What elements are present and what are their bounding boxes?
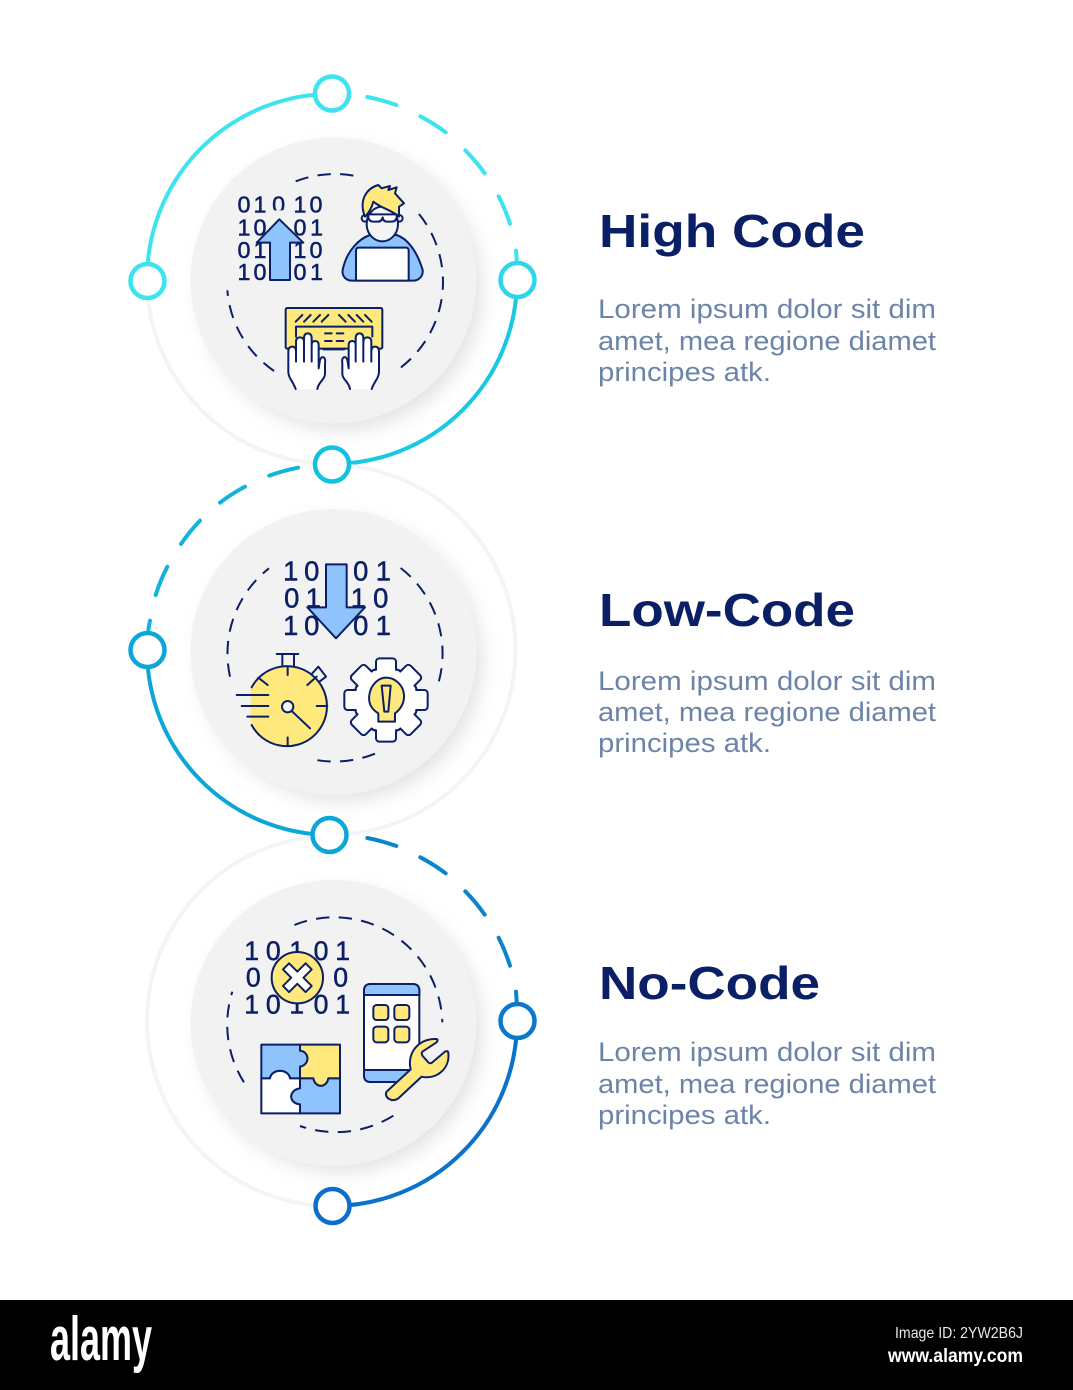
- icon: binary digits with up arrow: [238, 192, 323, 285]
- icon: binary digits with down arrow: 1: [376, 556, 391, 587]
- icon: binary digits crossed out: 0: [266, 989, 281, 1019]
- icon: binary digits crossed out: 0: [314, 936, 328, 966]
- icon: binary digits with up arrow: 1: [294, 192, 306, 218]
- icon: binary digits crossed out: 1: [289, 989, 304, 1019]
- icon: binary digits crossed out: 0: [314, 989, 328, 1019]
- panel: low-code: [130, 448, 937, 835]
- icon: binary digits with down arrow: 0: [353, 556, 368, 587]
- description: no-code: [598, 1037, 937, 1130]
- icon: binary digits with up arrow: 0: [310, 237, 323, 263]
- nodes: no-code: [312, 818, 534, 1223]
- icon: binary digits with up arrow: 1: [254, 192, 266, 218]
- icon: binary digits with down arrow: 1: [283, 610, 298, 641]
- icon: binary digits with down arrow: 0: [304, 610, 319, 641]
- icon: binary digits with up arrow: 0: [294, 259, 307, 285]
- icon: binary digits with up arrow: 0: [310, 192, 323, 218]
- circular track: no-code: [147, 836, 517, 1206]
- icon: binary digits with down arrow: 0: [353, 610, 368, 641]
- circular track: low-code: [147, 465, 516, 835]
- description: high code: amet, mea regione diamet: [598, 326, 937, 356]
- description: low-code: Lorem ipsum dolor sit dim: [598, 666, 936, 696]
- icon: binary digits crossed out: [244, 936, 350, 1019]
- image id: Image ID: 2YW2B6J: [895, 1325, 1023, 1342]
- icon: binary digits with up arrow: 1: [254, 237, 266, 263]
- icon: developer with laptop: [343, 185, 423, 281]
- icon: binary digits with up arrow: 0: [294, 214, 307, 240]
- icon: binary digits with up arrow: 0: [254, 214, 267, 240]
- description: low-code: [598, 666, 937, 758]
- icon: puzzle: [261, 1045, 340, 1113]
- description: high code: [598, 294, 937, 387]
- nodes: high code: [130, 76, 534, 298]
- central disc: no-code: [190, 880, 482, 1172]
- nodes: low-code: [130, 448, 349, 667]
- panel: high code: [130, 76, 937, 464]
- icon: binary digits crossed out: 0: [333, 963, 348, 993]
- circular track: high code: [147, 94, 517, 464]
- icon: keyboard with hands: [286, 308, 382, 389]
- icon: binary digits crossed out: 1: [335, 936, 350, 966]
- icon: binary digits with up arrow: 0: [254, 259, 267, 285]
- icon: phone with wrench: [364, 984, 448, 1100]
- icon: binary digits crossed out: 1: [244, 936, 259, 966]
- description: low-code: principes atk.: [598, 728, 771, 758]
- icon: binary digits with up arrow: 1: [238, 214, 250, 240]
- icon: faster development: [227, 556, 443, 762]
- description: high code: principes atk.: [598, 357, 771, 387]
- icon: gear with light bulb: [344, 658, 428, 742]
- icon: binary digits with up arrow: 0: [272, 192, 285, 218]
- icon: binary digits with down arrow: 1: [376, 610, 391, 641]
- description: low-code: amet, mea regione diamet: [598, 697, 937, 727]
- icon: binary digits with down arrow: 1: [306, 583, 321, 614]
- icon: binary digits with down arrow: 0: [304, 556, 319, 587]
- icon: binary digits with down arrow: 0: [284, 583, 299, 614]
- icon: binary digits crossed out: 0: [266, 936, 281, 966]
- heading: high code: High Code: [599, 205, 865, 257]
- footer: alamy stock bar: [0, 1300, 1073, 1390]
- central disc: high code: [190, 138, 482, 430]
- heading: low-code: Low-Code: [599, 584, 855, 636]
- panel: no-code: [147, 818, 937, 1223]
- icon: binary digits with up arrow: 1: [310, 259, 323, 285]
- icon: binary digits crossed out: 1: [289, 936, 304, 966]
- icon: binary digits with down arrow: 0: [373, 583, 388, 614]
- icon: binary digits with down arrow: 1: [351, 583, 366, 614]
- logo: alamy: alamy: [50, 1305, 152, 1374]
- icon: binary digits with up arrow: 0: [238, 237, 251, 263]
- icon: binary digits with up arrow: 1: [238, 259, 250, 285]
- heading: no-code: No-Code: [599, 957, 820, 1009]
- icon: developer typing code: [227, 174, 443, 389]
- icon: binary digits with down arrow: 1: [283, 556, 298, 587]
- icon: no-code app building: [227, 917, 448, 1132]
- description: high code: Lorem ipsum dolor sit dim: [598, 294, 936, 324]
- icon: binary digits with up arrow: 0: [238, 192, 251, 218]
- central disc: low-code: [190, 509, 482, 801]
- icon: binary digits with up arrow: 1: [310, 214, 323, 240]
- icon: binary digits crossed out: 1: [244, 989, 259, 1019]
- icon: stopwatch: [237, 654, 328, 746]
- icon: binary digits crossed out: 0: [246, 963, 261, 993]
- icon: binary digits with down arrow: [283, 556, 391, 641]
- icon: binary digits with up arrow: 1: [294, 237, 306, 263]
- description: no-code: amet, mea regione diamet: [598, 1069, 937, 1099]
- icon: binary digits crossed out: 1: [335, 989, 350, 1019]
- website: www.alamy.com: [887, 1346, 1023, 1367]
- description: no-code: principes atk.: [598, 1100, 771, 1130]
- description: no-code: Lorem ipsum dolor sit dim: [598, 1037, 936, 1067]
